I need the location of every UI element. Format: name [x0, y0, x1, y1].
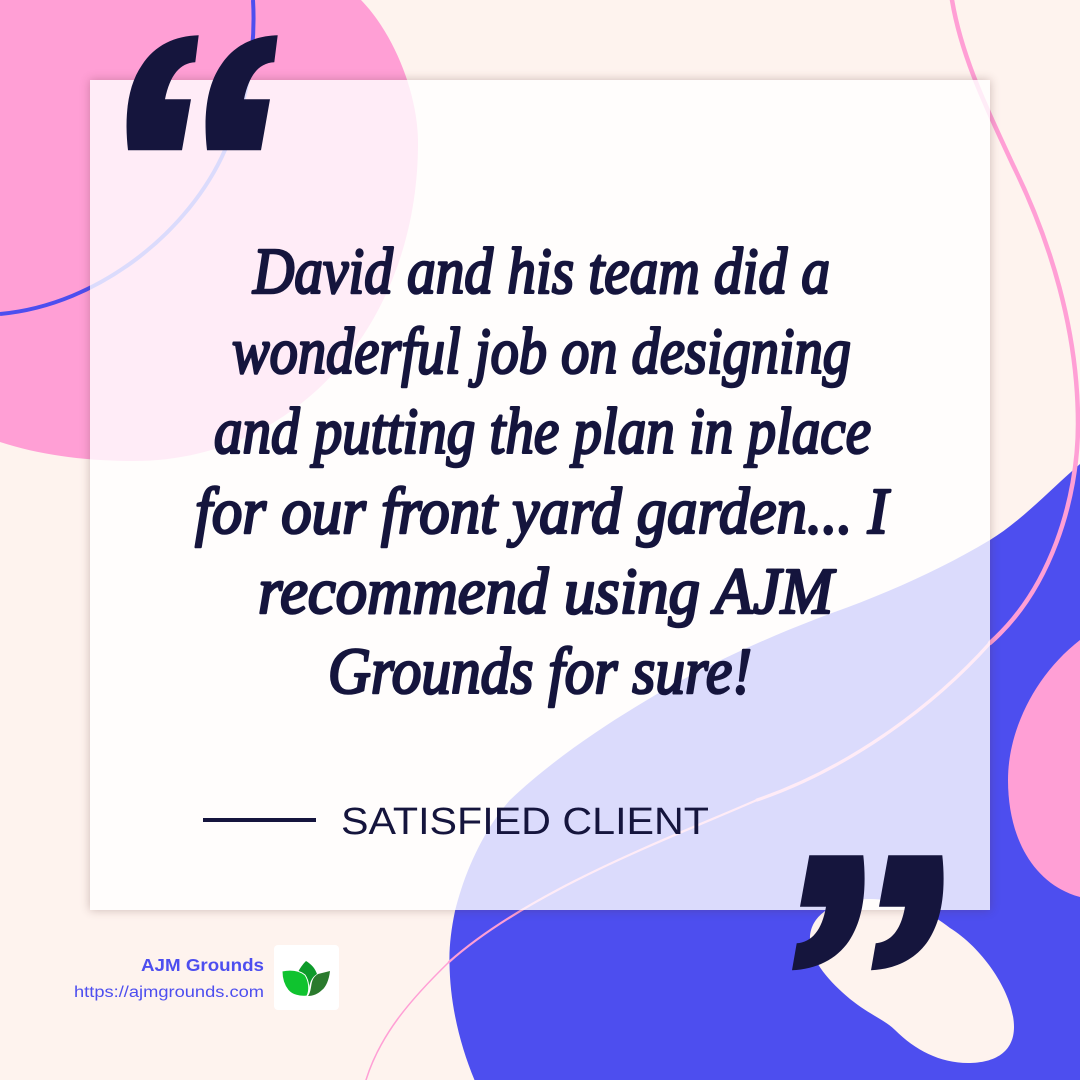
peach blob bottom right [810, 899, 1014, 1063]
blue blob bottom right [449, 464, 1080, 1080]
attribution line and label: SATISFIED CLIENT [341, 801, 709, 843]
brand name and URL [74, 955, 264, 1001]
testimonial quote text [195, 235, 891, 708]
brand name and URL: https://ajmgrounds.com [74, 984, 264, 1001]
testimonial quote text: David and his team did a [252, 235, 830, 308]
testimonial quote text: for our front yard garden... I [195, 475, 891, 548]
blue curved line top left [0, 0, 254, 314]
icon: closing quotation mark [792, 855, 944, 970]
brand name and URL: AJM Grounds [141, 955, 264, 975]
pink blob right edge [1008, 640, 1080, 897]
logo tile with leaves [274, 945, 339, 1010]
icon: opening quotation mark [127, 35, 278, 150]
white translucent card [90, 80, 990, 910]
testimonial quote text: recommend using AJM [258, 555, 837, 628]
testimonial quote text: Grounds for sure! [328, 635, 752, 708]
testimonial quote text: and putting the plan in place [214, 395, 871, 468]
testimonial quote text: wonderful job on designing [232, 315, 851, 388]
attribution line and label [203, 801, 709, 843]
pink curved line right and bottom [366, 0, 1078, 1080]
pink blob top left [0, 0, 418, 461]
